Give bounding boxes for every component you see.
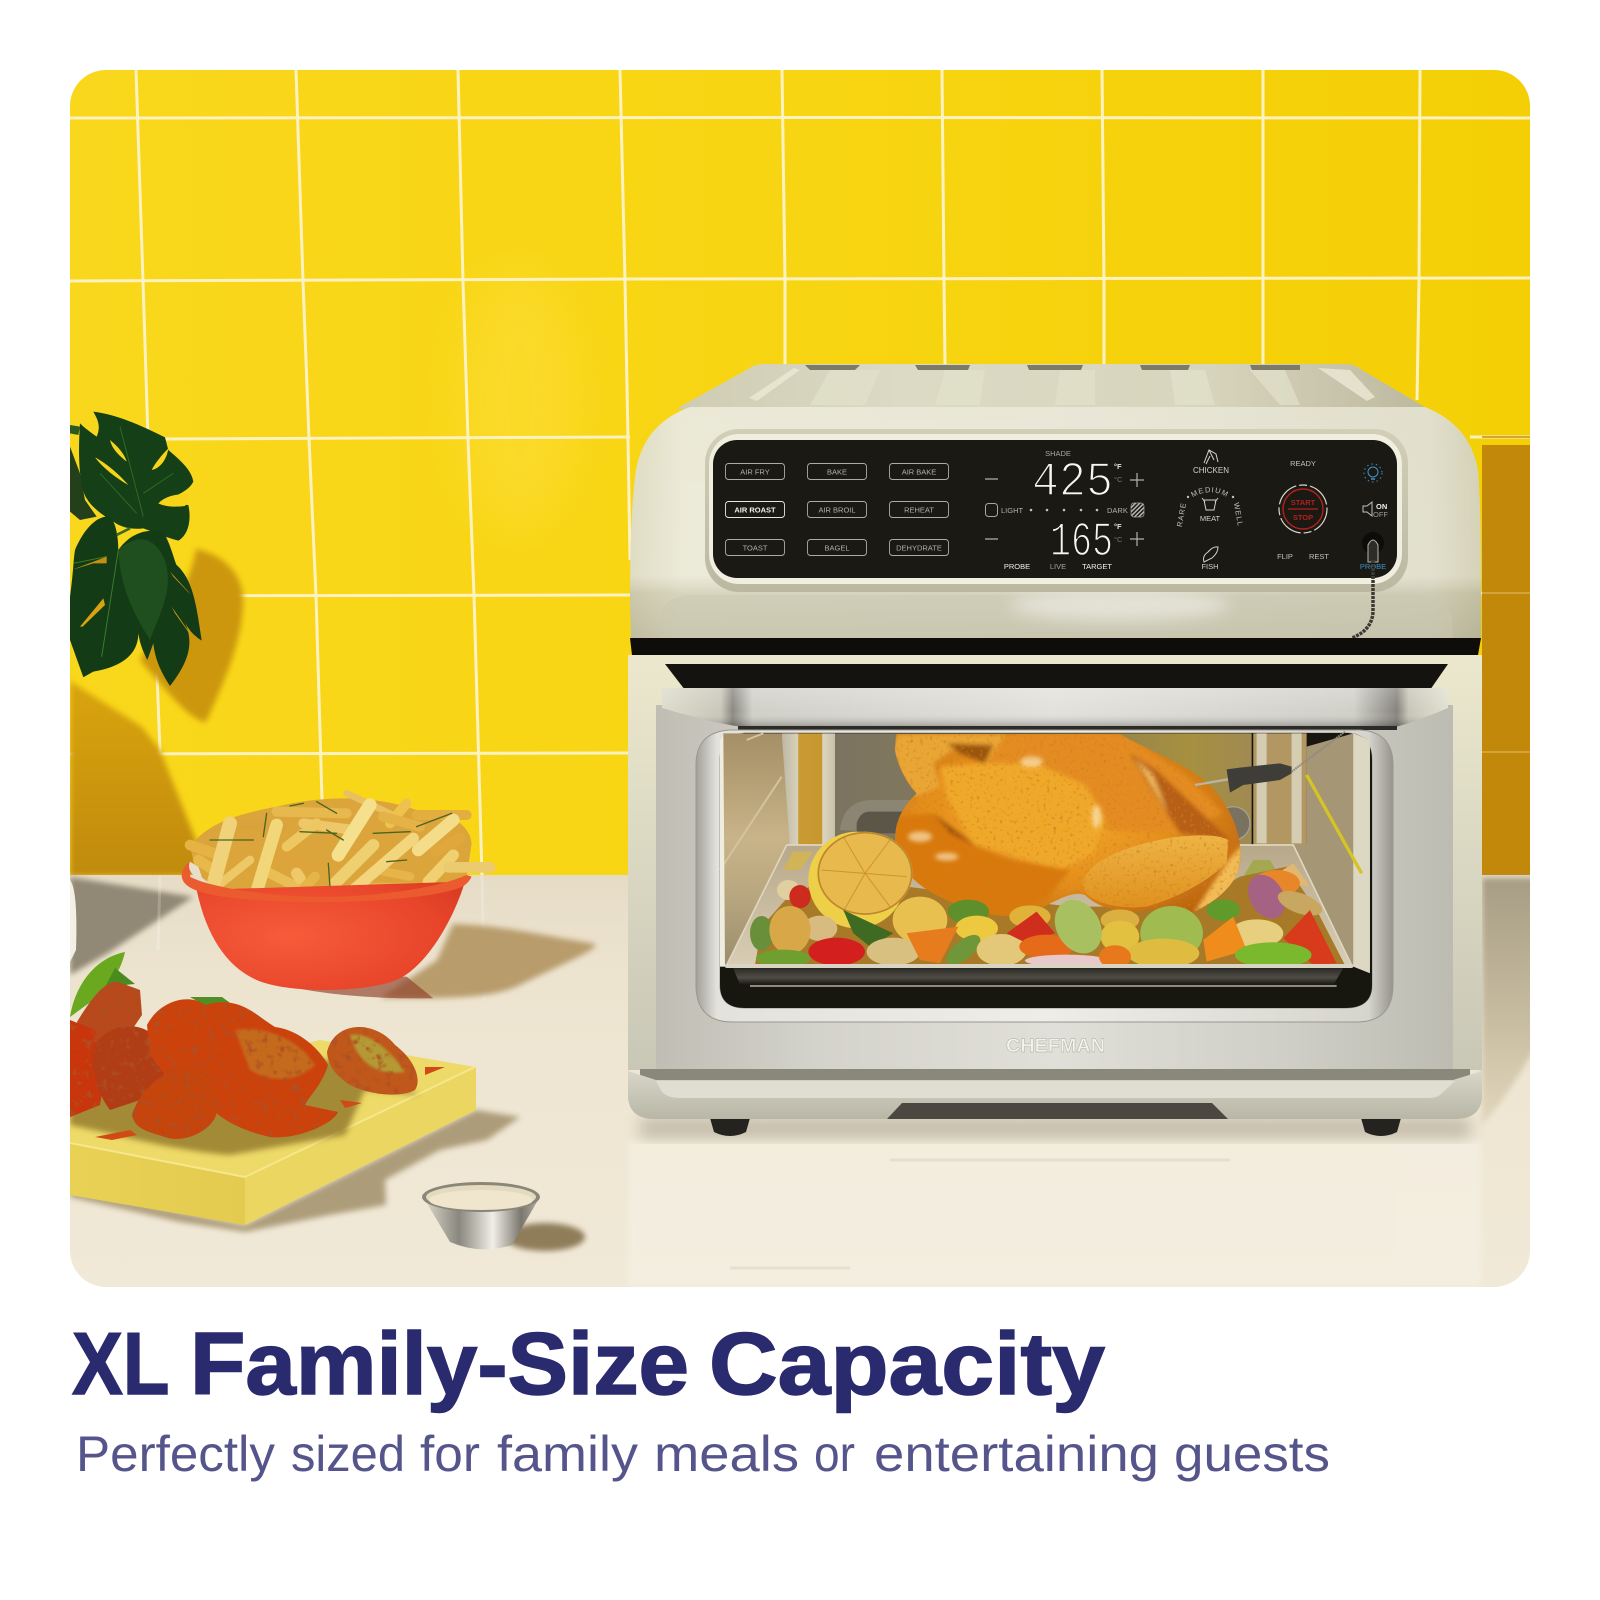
title: Capacity [709, 1314, 1105, 1413]
control panel bezel [705, 429, 1408, 592]
light, sound and probe controls: OFF [1373, 510, 1388, 519]
temperature and shade display: PROBE [1004, 562, 1030, 571]
dark recess under seam [665, 664, 1448, 690]
food mass under vegetables [755, 867, 1345, 965]
start stop button: READY [1290, 459, 1316, 468]
left pillar [782, 733, 835, 848]
probe [1195, 732, 1345, 793]
light, sound and probe controls [1352, 464, 1388, 638]
function buttons [726, 464, 948, 556]
doneness dial: FISH [1201, 562, 1219, 571]
temperature and shade display: °C [1114, 535, 1123, 544]
oven interior [720, 730, 1372, 1008]
light, sound and probe controls: ON [1376, 502, 1387, 511]
chicken highlights [908, 756, 1101, 861]
start stop button: START [1291, 498, 1316, 507]
temperature and shade display: 425 [1032, 456, 1113, 510]
board shadow [70, 1110, 520, 1232]
brand logo: CHEFMAN [1006, 1036, 1105, 1057]
temperature and shade display: °F [1114, 522, 1122, 531]
function labels [734, 468, 942, 552]
temperature and shade display: LIGHT [1001, 506, 1024, 515]
function labels: REHEAT [904, 506, 934, 514]
temperature and shade display: TARGET [1082, 562, 1112, 571]
oven base [628, 1069, 1482, 1119]
start stop button: STOP [1293, 513, 1313, 522]
lid with vents [676, 364, 1428, 409]
temperature and shade display: °C [1114, 475, 1123, 484]
cutting board [70, 1040, 476, 1225]
ramekin of sauce [422, 1182, 585, 1251]
subtitle: guests [1174, 1426, 1330, 1482]
subtitle: Perfectly [76, 1426, 275, 1482]
temperature and shade display: °F [1114, 462, 1122, 471]
tray front and base [725, 964, 1353, 987]
vegetables [750, 863, 1337, 970]
function labels: TOAST [743, 544, 768, 552]
doneness dial: MEAT [1200, 514, 1221, 523]
chicken [895, 734, 1240, 916]
subtitle: for [420, 1426, 480, 1482]
function labels: AIR ROAST [734, 506, 776, 514]
wall: yellow tiles [70, 70, 1530, 876]
temperature and shade display: 165 [1050, 516, 1113, 570]
light, sound and probe controls: PROBE [1360, 562, 1386, 571]
counter [70, 875, 1540, 1287]
subtitle: sized [291, 1426, 405, 1482]
subtitle: or [814, 1426, 855, 1482]
title: Family-Size [190, 1314, 689, 1413]
hot sauce drips [95, 1067, 445, 1140]
function labels: DEHYDRATE [896, 544, 942, 552]
wall shadows [70, 437, 1530, 878]
subtitle: meals [654, 1426, 799, 1482]
oven shadow and feet [640, 1118, 1470, 1138]
doneness dial: RARE [1175, 502, 1188, 528]
left side wall [720, 733, 790, 967]
bowl shadow on counter [380, 924, 595, 998]
door handle [662, 688, 1448, 728]
bowl body [182, 862, 472, 998]
back wall [835, 733, 1252, 848]
plant: monstera leaves [70, 412, 202, 686]
tray [727, 845, 1352, 965]
start stop button [1277, 459, 1329, 561]
oven lower body [628, 655, 1482, 1070]
door window frame [696, 730, 1393, 1022]
function labels: AIR BAKE [902, 468, 936, 476]
doneness dial: WELL [1232, 502, 1245, 527]
subtitle: entertaining [874, 1426, 1159, 1482]
fries [190, 793, 490, 897]
subtitle: family [497, 1426, 638, 1482]
function labels: AIR BROIL [818, 506, 856, 514]
black seam band [630, 638, 1481, 655]
doneness dial: CHICKEN [1193, 466, 1229, 475]
chicken wings [70, 982, 418, 1139]
panel: kitchen scene photo [70, 70, 1530, 1287]
title: XL [72, 1314, 168, 1413]
oven: air fryer toaster [628, 364, 1482, 1144]
lemon [808, 832, 913, 928]
function labels: BAGEL [824, 544, 850, 552]
temperature and shade display: LIVE [1050, 562, 1066, 571]
doneness dial [1176, 449, 1242, 569]
oven upper body [630, 407, 1481, 640]
bowl of fries [182, 793, 490, 998]
temperature and shade display [985, 449, 1144, 571]
rack hole [840, 800, 910, 831]
right side wall [1287, 733, 1370, 967]
start stop button: FLIP [1277, 552, 1293, 561]
function labels: AIR FRY [740, 468, 770, 476]
function labels: BAKE [827, 468, 847, 476]
start stop button: REST [1309, 552, 1329, 561]
doneness dial: MEDIUM [1190, 487, 1228, 497]
green leaf garnish [70, 952, 230, 1017]
temperature and shade display: DARK [1107, 506, 1128, 515]
temperature and shade display: SHADE [1045, 449, 1071, 458]
